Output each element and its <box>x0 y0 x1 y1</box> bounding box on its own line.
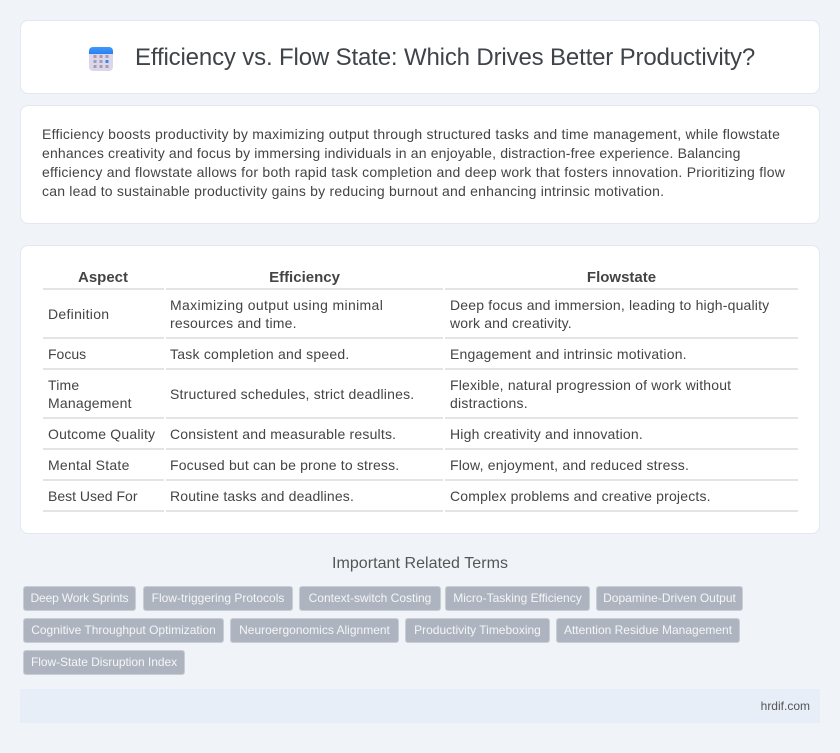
intro text panel: enhances creativity and focus by immersing individuals in an enjoyable, distraction-free experience. Balancing <box>42 145 741 161</box>
tag: Context-switch Costing <box>309 591 431 605</box>
row: best used for <box>48 488 711 504</box>
row: mental state: Mental State <box>48 457 130 473</box>
row: outcome quality: Outcome Quality <box>48 426 155 442</box>
tag: Neuroergonomics Alignment <box>239 623 390 637</box>
related terms tags <box>23 586 743 675</box>
intro text panel <box>20 105 820 224</box>
tag <box>23 650 185 675</box>
tag <box>23 586 136 611</box>
row: focus: Engagement and intrinsic motivation. <box>450 346 687 362</box>
related terms heading: Important Related Terms <box>332 555 508 572</box>
row: outcome quality <box>48 426 643 442</box>
row: time management: Structured schedules, strict deadlines. <box>170 386 414 402</box>
tag <box>596 586 743 611</box>
intro text panel: can lead to sustainable productivity gains by reducing burnout and enhancing intrinsic motivation. <box>42 183 664 199</box>
tag <box>556 618 740 643</box>
tag: Flow-State Disruption Index <box>31 655 177 669</box>
row: outcome quality: Consistent and measurable results. <box>170 426 396 442</box>
row: definition: work and creativity. <box>450 315 572 331</box>
tag: Deep Work Sprints <box>31 591 128 605</box>
intro text panel: efficiency and flowstate allows for both rapid task completion and deep work that fosters innovation. Prioritizing flow <box>42 164 785 180</box>
row: definition <box>48 297 770 331</box>
tag <box>23 618 224 643</box>
tag <box>143 586 293 611</box>
footer credit: hrdif.com <box>761 699 810 713</box>
row: best used for: Routine tasks and deadlines. <box>170 488 354 504</box>
row: focus: Task completion and speed. <box>170 346 350 362</box>
table header <box>78 269 656 286</box>
row: focus <box>48 346 687 362</box>
tag: Flow-triggering Protocols <box>152 591 284 605</box>
footer bar <box>20 689 820 723</box>
row: mental state: Flow, enjoyment, and reduced stress. <box>450 457 689 473</box>
table header: Flowstate <box>587 269 656 286</box>
row: best used for: Best Used For <box>48 488 137 504</box>
tag: Attention Residue Management <box>564 623 732 637</box>
row: time management: distractions. <box>450 395 528 411</box>
header card <box>20 20 820 94</box>
title: Efficiency vs. Flow State: Which Drives Better Productivity? <box>135 44 755 71</box>
intro text panel: Efficiency boosts productivity by maximizing output through structured tasks and time management, while flowstate <box>42 126 780 142</box>
row: time management: Time <box>48 377 79 393</box>
row: mental state <box>48 457 689 473</box>
row: definition: Maximizing output using minimal <box>170 297 383 313</box>
table header: Efficiency <box>269 269 340 286</box>
tag <box>230 618 399 643</box>
row: best used for: Complex problems and creative projects. <box>450 488 711 504</box>
row: time management <box>48 377 731 411</box>
row: definition: Definition <box>48 306 109 322</box>
table header: Aspect <box>78 269 128 286</box>
icon: calendar <box>89 47 113 71</box>
row: time management: Flexible, natural progression of work without <box>450 377 731 393</box>
row: time management: Management <box>48 395 132 411</box>
row: outcome quality: High creativity and innovation. <box>450 426 643 442</box>
comparison table panel <box>20 245 820 534</box>
tag: Cognitive Throughput Optimization <box>31 623 216 637</box>
row: definition: resources and time. <box>170 315 297 331</box>
row: mental state: Focused but can be prone to stress. <box>170 457 399 473</box>
tag <box>445 586 590 611</box>
tag: Dopamine-Driven Output <box>603 591 736 605</box>
tag: Productivity Timeboxing <box>414 623 541 637</box>
tag <box>405 618 550 643</box>
row: definition: Deep focus and immersion, leading to high-quality <box>450 297 769 313</box>
row: focus: Focus <box>48 346 86 362</box>
tag <box>299 586 441 611</box>
tag: Micro-Tasking Efficiency <box>453 591 582 605</box>
